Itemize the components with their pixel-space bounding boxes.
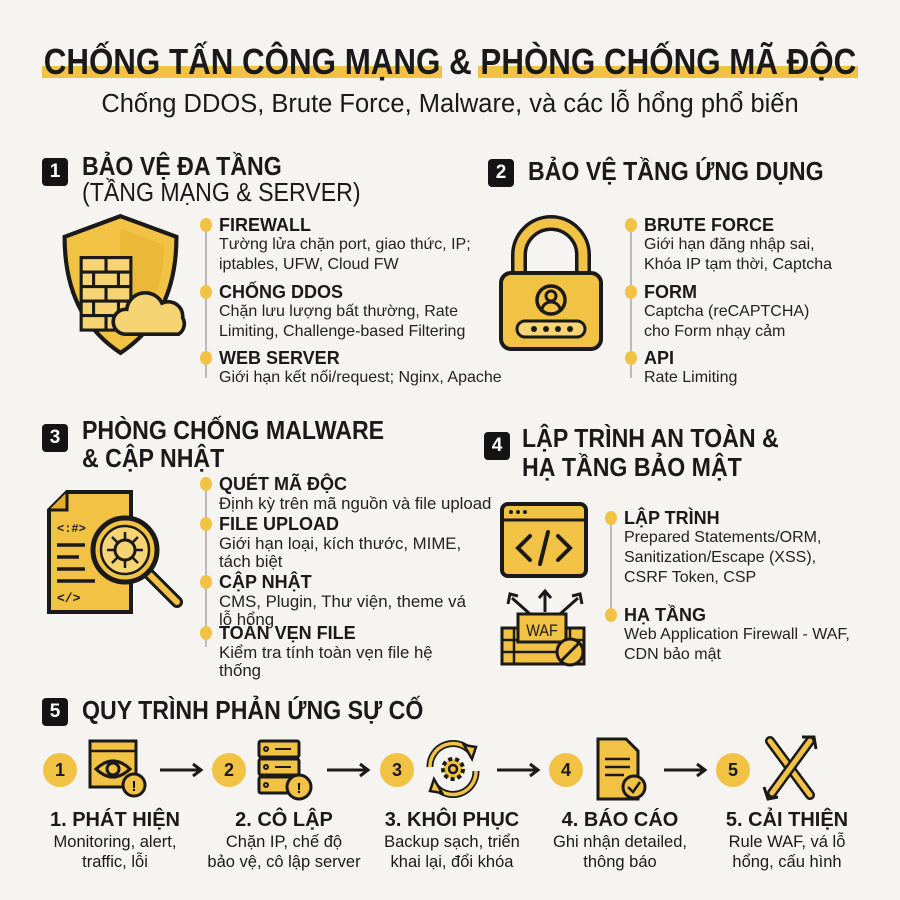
item: update: lỗ hổng	[219, 610, 274, 629]
icon: code window	[500, 502, 588, 578]
item: firewall: Tường lửa chặn port, giao thức, IP;	[219, 236, 471, 253]
step 3 number	[380, 753, 414, 787]
process flow: Rule WAF, vá lỗ	[729, 833, 845, 851]
process flow	[43, 736, 848, 871]
item: web server	[200, 348, 502, 386]
item: scan	[200, 473, 491, 513]
step 1 number: 1	[55, 760, 65, 780]
process flow: 5. CẢI THIỆN	[726, 809, 848, 831]
item: programming: Sanitization/Escape (XSS),	[624, 549, 816, 566]
section 1 heading: 1	[50, 161, 60, 182]
step 4 number: 4	[561, 760, 571, 780]
process flow: 2. CÔ LẬP	[235, 809, 333, 831]
icon: WAF wall: WAF	[526, 622, 558, 640]
process flow: Backup sạch, triển	[384, 833, 520, 851]
item: update: CMS, Plugin, Thư viện, theme vá	[219, 592, 466, 611]
list: section 2	[625, 215, 832, 386]
section 1 heading: BẢO VỆ ĐA TẦNG	[82, 151, 282, 181]
item: file upload	[200, 514, 461, 571]
section 3 heading: 3	[50, 427, 60, 448]
section 3 heading: PHÒNG CHỐNG MALWARE	[82, 415, 384, 445]
item: programming	[605, 507, 821, 586]
arrow	[327, 762, 370, 778]
step labels: 1. PHÁT HIỆN	[50, 809, 180, 831]
title: CHỐNG TẤN CÔNG MẠNG & PHÒNG CHỐNG MÃ ĐỘC	[44, 41, 856, 82]
icon: WAF wall	[500, 588, 586, 666]
item: scan: Định kỳ trên mã nguồn và file upload	[219, 494, 491, 513]
item: api	[625, 348, 737, 386]
section 1 heading	[42, 151, 361, 207]
process flow: hổng, cấu hình	[732, 853, 842, 871]
icon: gear recovery	[426, 740, 480, 798]
list: section 1	[200, 215, 502, 386]
process flow: Chặn IP, chế độ	[226, 833, 342, 851]
step labels: Monitoring, alert,	[54, 833, 176, 851]
process flow: 3. KHÔI PHỤC	[385, 809, 519, 831]
item: ddos: Limiting, Challenge-based Filtering	[219, 323, 465, 340]
section 1 heading: (TẦNG MẠNG & SERVER)	[82, 177, 361, 207]
icon: monitor eye	[88, 740, 146, 798]
item: api: Rate Limiting	[644, 369, 737, 386]
section 4 heading: LẬP TRÌNH AN TOÀN &	[522, 423, 779, 453]
item: integrity: TOÀN VẸN FILE	[219, 623, 356, 643]
item: scan: QUÉT MÃ ĐỘC	[219, 474, 347, 494]
step 3 number: 3	[392, 760, 402, 780]
item: programming: CSRF Token, CSP	[624, 569, 756, 586]
process flow: khai lại, đổi khóa	[391, 853, 513, 871]
icon: padlock	[499, 215, 603, 351]
item: brute force: BRUTE FORCE	[644, 215, 774, 235]
step 5 number: 5	[728, 760, 738, 780]
icon: report doc	[596, 738, 646, 800]
section 3 heading	[42, 415, 384, 473]
item: infrastructure	[605, 604, 850, 663]
item: firewall: FIREWALL	[219, 215, 311, 235]
process flow: 4. BÁO CÁO	[562, 809, 678, 831]
item: programming: LẬP TRÌNH	[624, 508, 720, 528]
step 1 number	[43, 753, 77, 787]
item: infrastructure: CDN bảo mật	[624, 646, 721, 663]
item: form: cho Form nhạy cảm	[644, 323, 785, 340]
subtitle: Chống DDOS, Brute Force, Malware, và các lỗ hổng phổ biến	[101, 90, 799, 118]
section 3 heading: & CẬP NHẬT	[82, 443, 224, 473]
icon: code document with magnifier and virus: </>	[57, 591, 81, 606]
item: integrity: Kiểm tra tính toàn vẹn file hệ	[219, 643, 433, 662]
icon: monitor eye: !	[132, 778, 136, 795]
item: brute force: Khóa IP tạm thời, Captcha	[644, 256, 832, 273]
section 5 heading: 5	[50, 701, 60, 722]
item: brute force: Giới hạn đăng nhập sai,	[644, 236, 815, 253]
item: firewall	[200, 215, 471, 273]
process flow: thông báo	[583, 853, 657, 871]
step 4 number	[549, 753, 583, 787]
list: section 4	[605, 507, 850, 663]
item: integrity	[200, 622, 433, 680]
item: web server: WEB SERVER	[219, 348, 340, 368]
step labels	[50, 808, 180, 871]
item: infrastructure: HẠ TẦNG	[624, 605, 706, 625]
icon: server alert: !	[296, 780, 302, 797]
item: ddos	[200, 281, 465, 340]
item: api: API	[644, 348, 674, 368]
section 4 heading	[484, 423, 779, 482]
item: update: CẬP NHẬT	[219, 572, 312, 592]
icon: shield with firewall and cloud	[62, 214, 186, 356]
item: ddos: CHỐNG DDOS	[219, 282, 343, 302]
section 4 heading: HẠ TẦNG BẢO MẬT	[522, 452, 742, 482]
arrow	[160, 762, 204, 778]
item: integrity: thống	[219, 661, 261, 680]
item: file upload: tách biệt	[219, 552, 282, 571]
section 2 heading: 2	[496, 162, 506, 183]
section 4 heading: 4	[492, 435, 502, 456]
item: form: FORM	[644, 282, 697, 302]
list: section 3	[200, 473, 491, 680]
icon: code document with magnifier and virus: <:#>	[57, 522, 86, 536]
arrow	[497, 762, 540, 778]
step 2 number: 2	[224, 760, 234, 780]
process flow: bảo vệ, cô lập server	[207, 853, 361, 871]
item: file upload: FILE UPLOAD	[219, 514, 339, 534]
icon: server alert	[258, 740, 312, 800]
section 5 heading: QUY TRÌNH PHẢN ỨNG SỰ CỐ	[82, 695, 423, 725]
process flow: Ghi nhận detailed,	[553, 833, 687, 851]
item: web server: Giới hạn kết nối/request; Nginx, Apache	[219, 369, 502, 386]
icon: tools	[762, 736, 818, 801]
icon: code document with magnifier and virus	[47, 490, 183, 614]
item: brute force	[625, 215, 832, 273]
section 2 heading: BẢO VỆ TẦNG ỨNG DỤNG	[528, 156, 824, 186]
item: update	[200, 571, 466, 629]
step labels: traffic, lỗi	[82, 853, 148, 871]
item: infrastructure: Web Application Firewall - WAF,	[624, 626, 850, 643]
item: form	[625, 282, 809, 340]
item: ddos: Chặn lưu lượng bất thường, Rate	[219, 303, 458, 320]
item: file upload: Giới hạn loại, kích thước, MIME,	[219, 534, 461, 553]
item: form: Captcha (reCAPTCHA)	[644, 303, 809, 320]
step 5 number	[716, 753, 750, 787]
step 2 number	[212, 753, 246, 787]
arrow	[664, 762, 708, 778]
item: programming: Prepared Statements/ORM,	[624, 529, 821, 546]
item: firewall: iptables, UFW, Cloud FW	[219, 256, 399, 273]
